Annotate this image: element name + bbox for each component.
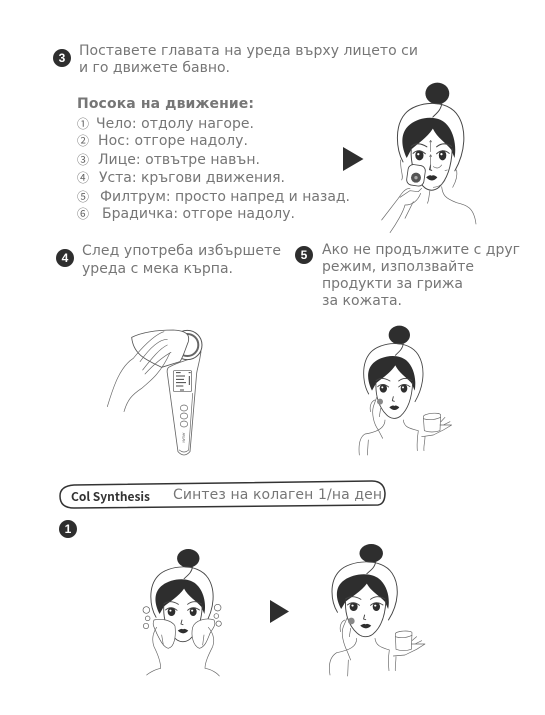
hand — [107, 332, 171, 412]
illustration: woman applying cream (step 5) — [359, 326, 452, 455]
illustration: woman washing face with foam — [143, 549, 221, 676]
step 4 text: уреда с мека кърпа. — [82, 261, 233, 277]
illustration: face with device and movement arrows — [382, 83, 476, 233]
device body: ANLAN — [182, 433, 186, 443]
arrow: bottom — [270, 600, 289, 623]
step 5 text: Ако не продължите с друг — [322, 242, 520, 258]
list of movement directions: Филтрум: просто напред и назад. — [100, 189, 350, 205]
list of movement directions: Лице: отвътре навън. — [98, 152, 260, 168]
step 4 number badge: 4 — [62, 251, 69, 265]
step 1 number badge — [59, 520, 77, 538]
list of movement directions: ③ — [77, 151, 89, 168]
arrow: top — [343, 147, 364, 171]
step 5 text: режим, използвайте — [322, 259, 474, 275]
cloth — [132, 330, 189, 367]
list of movement directions: ⑥ — [77, 205, 89, 222]
step 3 number badge: 3 — [59, 51, 66, 65]
list of movement directions: ② — [77, 132, 89, 149]
label pill: Col Synthesis: Синтез на колаген 1/на ден — [173, 487, 382, 503]
illustration: hand wiping device with cloth — [107, 330, 202, 455]
list of movement directions: ⑤ — [77, 188, 89, 205]
label pill: Col Synthesis: Col Synthesis — [71, 488, 150, 505]
list of movement directions: Нос: отгоре надолу. — [98, 133, 248, 149]
heading: direction of movement: Посока на движение: — [77, 96, 254, 112]
step 5 text: продукти за грижа — [322, 276, 463, 292]
step 3 number badge — [53, 49, 71, 67]
step 1 number badge: 1 — [65, 522, 72, 536]
list of movement directions: ④ — [77, 169, 89, 186]
step 3 text — [79, 43, 418, 76]
list of movement directions: Чело: отдолу нагоре. — [96, 116, 254, 132]
list of movement directions: Уста: кръгови движения. — [99, 170, 285, 186]
step 3 text: Поставете главата на уреда върху лицето си — [79, 43, 418, 59]
list of movement directions — [77, 115, 350, 222]
label pill: Col Synthesis — [60, 481, 385, 508]
list of movement directions: Брадичка: отгоре надолу. — [102, 206, 295, 222]
step 5 number badge — [295, 246, 313, 264]
step 5 text — [322, 242, 520, 309]
step 4 text: След употреба избършете — [82, 243, 281, 259]
step 4 text — [82, 243, 281, 277]
step 5 text: за кожата. — [322, 293, 402, 309]
step 3 text: и го движете бавно. — [79, 60, 230, 76]
illustration: woman applying cream (step 1) — [329, 544, 425, 676]
list of movement directions: ① — [77, 115, 89, 132]
step 5 number badge: 5 — [301, 248, 308, 262]
step 4 number badge — [56, 249, 74, 267]
